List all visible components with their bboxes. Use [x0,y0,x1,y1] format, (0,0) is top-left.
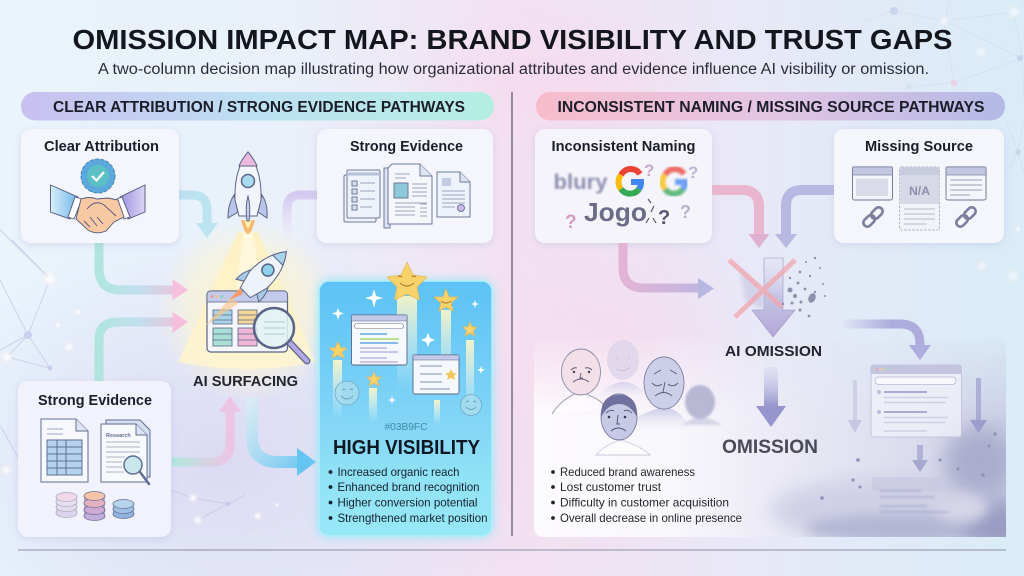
icon: checklist document [344,170,380,222]
icon: blurred G logo [662,169,685,194]
label: AI omission: AI OMISSION [725,343,822,360]
search results window [352,315,407,365]
icon: window with placeholder [852,167,892,200]
arrow: faint left down [848,380,862,433]
card title: Clear Attribution [44,138,159,155]
label: omission outcome: OMISSION [722,437,818,458]
benefits list: Increased organic reach [338,465,460,479]
question marks: ? [688,163,698,182]
column divider [511,92,513,536]
consequences list [551,465,742,525]
card: strong evidence (bottom) [18,381,171,537]
dust particles [820,432,997,500]
icon: databases [56,492,134,520]
subtitle: A two-column decision map illustrating how organizational attributes and evidence influence AI visibility or omission. [98,61,929,78]
left column heading [21,92,494,120]
arrow: strong evidence to AI surfacing (upper) [99,312,188,381]
benefits list: Enhanced brand recognition [338,480,480,494]
icon: smiley faces [335,381,482,416]
title: OMISSION IMPACT MAP: BRAND VISIBILITY AND TRUST GAPS [72,24,952,55]
card: clear attribution [21,129,179,243]
person 3 [636,357,690,432]
icon: rocket over browser [205,240,298,326]
question marks: ? [658,207,670,229]
icon: handshake [50,185,145,233]
fading lower window [872,477,949,512]
background network: right [860,0,1024,284]
person 1 [552,349,606,414]
AI surfacing glow and light cone [156,218,340,402]
icon: window with lines [946,167,986,200]
right column heading: INCONSISTENT NAMING / MISSING SOURCE PATHWAYS [558,99,985,116]
arrow: clear attribution to rocket [179,195,218,238]
benefits list [329,465,488,525]
footer rule [18,549,1006,551]
light beams [333,296,474,425]
icon: report document [384,164,432,228]
person 4 [596,394,650,455]
icon: browser with table and magnifier [207,291,307,361]
icon: broken link right [955,206,977,228]
benefits list: Higher conversion potential [338,496,478,510]
icon: blocked arrow with cross and debris [729,257,826,337]
icon: certificate [437,172,470,217]
panel: omission outcome [534,340,1006,537]
icon: verified badge [81,159,115,193]
card title: Missing Source [865,138,973,155]
card title: Inconsistent Naming [552,138,696,155]
icon: missing N/A window [900,167,940,230]
blurred wordmark: blury [554,171,608,194]
icon: missing N/A window: N/A [909,184,930,198]
question marks: ? [644,161,654,180]
consequences list: Reduced brand awareness [560,465,695,479]
right column heading [536,92,1005,120]
arrow: AI omission to fading results [843,324,931,360]
question marks: ? [680,202,691,222]
sparkles [332,289,485,404]
arrow: right down [970,378,987,433]
blurred person [682,385,722,425]
arrow: AI surfacing to high visibility [252,397,316,476]
arrow: clear attribution to AI surfacing [99,243,188,300]
arrow: strong evidence to AI surfacing (lower) [172,396,241,462]
arrow: inconsistent naming down to AI omission [623,243,714,299]
card title: Strong Evidence [38,392,152,409]
consequences list: Lost customer trust [560,480,662,494]
consequences list: Overall decrease in online presence [560,511,742,525]
hex code label: #03B9FC [384,421,428,433]
icon: G logo [618,169,641,194]
icon: broken link left [862,206,884,228]
icon: research document with magnifier [101,420,150,484]
people with worried faces [552,340,722,455]
arrow: missing source to AI omission [775,190,834,248]
card: missing source [834,129,1004,243]
left column heading: CLEAR ATTRIBUTION / STRONG EVIDENCE PATHWAYS [53,99,465,116]
icon: research document with magnifier: Research [106,433,131,439]
background network: left [0,230,280,526]
benefits list: Strengthened market position [338,511,488,525]
ghost person [595,340,650,400]
fading search window [871,365,962,437]
icon: launching rocket [228,152,267,234]
heading: high visibility: HIGH VISIBILITY [333,437,481,459]
consequences list: Difficulty in customer acquisition [560,496,729,510]
arrow: AI omission to omission [756,367,786,427]
panel: high visibility [319,262,492,536]
icon: spreadsheet document [41,419,88,482]
question marks: ? [565,212,577,233]
question marks [565,161,698,233]
broken wordmark: Jogo [584,197,647,227]
card: strong evidence (top) [317,129,493,243]
arrow: inconsistent naming to AI omission [712,190,770,248]
label: AI surfacing: AI SURFACING [193,373,298,390]
small results window [413,355,459,394]
arrow: strong evidence to rocket [287,195,317,240]
card: inconsistent naming [535,129,712,243]
card title: Strong Evidence [350,138,463,155]
icon: smiling stars [329,262,477,386]
arrow: middle down [912,445,928,472]
